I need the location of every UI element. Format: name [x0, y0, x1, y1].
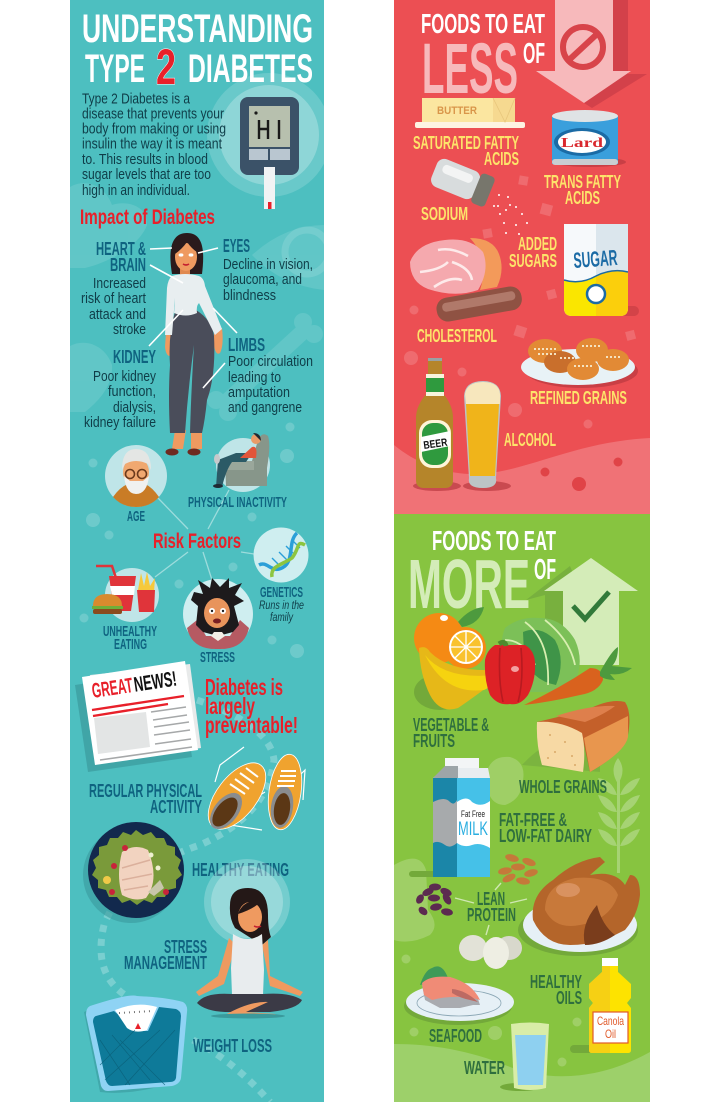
icon: newspaper [75, 661, 201, 772]
label: physical inactivity: PHYSICAL INACTIVITY [188, 494, 287, 511]
callout: heart & brain: BRAIN [110, 255, 146, 275]
title: foods to eat less of: LESS [422, 30, 518, 109]
label: genetics: Runs in the [259, 600, 304, 612]
callout: limbs [228, 335, 313, 416]
callout: eyes: blindness [223, 287, 276, 304]
text: diabetes is largely preventable: Diabetes is [205, 674, 283, 700]
icon: sugar bag [564, 224, 639, 316]
label: unhealthy eating [103, 623, 157, 653]
label: genetics: GENETICS [260, 584, 303, 601]
text: intro paragraph: sugar levels that are too [82, 166, 211, 183]
label: added sugars: SUGARS [509, 251, 557, 271]
text: intro paragraph: Type 2 Diabetes is a [82, 90, 191, 108]
connector lines: lean protein [455, 883, 527, 935]
heading: impact of diabetes: Impact of Diabetes [80, 206, 215, 229]
title: TYPE [85, 47, 145, 91]
callout: eyes [223, 236, 313, 304]
title: foods to eat less of [421, 8, 545, 109]
text: intro paragraph [82, 90, 226, 199]
title [82, 7, 313, 95]
icon: lard can [552, 110, 626, 167]
label: genetics: family [270, 612, 294, 624]
icon: canola oil bottle: Canola [597, 1014, 624, 1028]
icon: butter [415, 98, 525, 128]
icon: meat and sausage [410, 238, 524, 323]
label: refined grains: REFINED GRAINS [530, 388, 627, 408]
label: fat-free & low-fat dairy: LOW-FAT DAIRY [499, 826, 592, 846]
callout: heart & brain: attack and [89, 306, 146, 323]
icon: lard can: Lard [561, 136, 603, 151]
callout: limbs: leading to [228, 369, 281, 386]
callout: heart & brain: stroke [113, 321, 146, 338]
title: foods to eat more of: FOODS TO EAT [432, 525, 556, 556]
label: stress management: MANAGEMENT [124, 953, 207, 973]
icon: salad plate [83, 822, 184, 923]
figure: woman [165, 233, 223, 456]
icon: butter: BUTTER [437, 105, 477, 117]
title: UNDERSTANDING [82, 7, 313, 51]
icon: almonds [497, 853, 539, 886]
callout: eyes: Decline in vision, [223, 256, 313, 273]
label: saturated fatty acids: ACIDS [484, 149, 519, 169]
title: DIABETES [188, 47, 313, 91]
callout: kidney [84, 347, 156, 431]
text: intro paragraph: insulin the way it is meant [82, 136, 223, 152]
label: added sugars: ADDED [518, 234, 557, 254]
icon: glass of water [500, 1022, 549, 1091]
text: diabetes is largely preventable [205, 674, 298, 738]
callout: kidney: dialysis, [113, 399, 156, 416]
icon: bread loaf [522, 701, 629, 772]
icon: sugar bag: SUGAR [573, 245, 618, 273]
icon: stressed woman (stress) [183, 578, 253, 649]
icon: wheat [598, 758, 640, 873]
text: diabetes is largely preventable: largely [205, 693, 255, 719]
text: intro paragraph: high in an individual. [82, 182, 190, 199]
label: healthy eating: HEALTHY EATING [192, 860, 289, 880]
label: regular physical activity: REGULAR PHYSICAL [89, 781, 202, 801]
text: intro paragraph: to. This results in blood [82, 151, 208, 168]
label: lean protein: PROTEIN [467, 905, 516, 925]
icon: eggs [459, 935, 522, 969]
callout: limbs: Poor circulation [228, 353, 313, 370]
label: trans fatty acids: TRANS FATTY [544, 172, 621, 192]
label: stress management [124, 937, 207, 973]
connector lines: risk factors [155, 490, 254, 580]
callout: heart & brain: risk of heart [81, 290, 147, 307]
label: alcohol: ALCOHOL [504, 430, 556, 450]
title: 2 [156, 39, 176, 95]
icon: milk carton [409, 758, 490, 877]
label: healthy oils: OILS [556, 988, 582, 1008]
text: intro paragraph: body from making or using [82, 120, 226, 138]
panel: foods to eat less of [394, 0, 650, 514]
icon: fruits and vegetables [414, 607, 632, 710]
icon: milk carton: Fat Free [461, 809, 485, 819]
icon: dna (genetics) [254, 528, 308, 582]
label: water: WATER [464, 1058, 505, 1078]
callout: kidney: KIDNEY [113, 347, 156, 367]
label: unhealthy eating: EATING [114, 636, 147, 653]
label: vegetable & fruits: VEGETABLE & [413, 715, 489, 735]
label: genetics [259, 584, 304, 624]
callout: limbs: LIMBS [228, 335, 265, 355]
label: vegetable & fruits [413, 715, 489, 751]
label: whole grains: WHOLE GRAINS [519, 777, 607, 797]
icon: beer bottle and glass [413, 358, 511, 491]
label: regular physical activity: ACTIVITY [150, 797, 202, 817]
icon: glucose meter [207, 73, 331, 209]
title: foods to eat more of: OF [534, 554, 556, 586]
callout lines: body [149, 248, 237, 388]
label: regular physical activity [89, 781, 202, 817]
label: weight loss: WEIGHT LOSS [193, 1036, 272, 1056]
icon: beer bottle and glass: BEER [423, 437, 448, 452]
icon: running shoes [197, 747, 306, 839]
label: lean protein [467, 889, 516, 925]
icon: bread rolls on plate [521, 338, 638, 388]
icon: fast food (unhealthy eating) [92, 566, 159, 622]
title: foods to eat more of: MORE [408, 545, 530, 623]
icon: older man (age) [105, 445, 167, 507]
title: foods to eat less of: FOODS TO EAT [421, 8, 545, 39]
icon: canola oil bottle [570, 958, 631, 1053]
panel: understanding type 2 diabetes [70, 0, 331, 1102]
callout: limbs: and gangrene [228, 399, 302, 416]
icon: kidney beans [414, 884, 454, 917]
icon: meditating woman [196, 859, 303, 1018]
callout: limbs: amputation [228, 384, 290, 401]
label: lean protein: LEAN [477, 889, 505, 909]
label: fat-free & low-fat dairy [499, 810, 592, 846]
callout: heart & brain [81, 239, 147, 338]
label: healthy oils: HEALTHY [530, 972, 582, 992]
icon: newspaper: NEWS! [132, 668, 178, 697]
callout: kidney: kidney failure [84, 414, 156, 431]
icon: milk carton: MILK [458, 819, 488, 840]
callout: heart & brain: HEART & [96, 239, 146, 259]
icon: salt shaker [428, 156, 528, 235]
callout: eyes: glaucoma, and [223, 271, 302, 288]
icon: down arrow with no symbol [536, 0, 647, 108]
icon: canola oil bottle: Oil [605, 1027, 616, 1041]
label: saturated fatty acids: SATURATED FATTY [413, 133, 519, 153]
label: fat-free & low-fat dairy: FAT-FREE & [499, 810, 567, 830]
icon: weighing scale [84, 995, 187, 1093]
title: foods to eat less of: OF [523, 38, 545, 70]
label: seafood: SEAFOOD [429, 1026, 482, 1046]
label: unhealthy eating: UNHEALTHY [103, 623, 157, 640]
panel: foods to eat more of [394, 514, 650, 1102]
text: intro paragraph: disease that prevents your [82, 106, 224, 122]
callout: kidney: Poor kidney [93, 368, 156, 385]
icon: man in armchair (physical inactivity) [213, 433, 270, 492]
icon: salmon on plate [404, 966, 514, 1025]
icon: up arrow with check [526, 558, 638, 665]
label: cholesterol: CHOLESTEROL [417, 326, 497, 346]
heading: risk factors: Risk Factors [153, 530, 241, 553]
callout: kidney: function, [108, 383, 156, 400]
callout: heart & brain: Increased [93, 275, 146, 292]
icon: roast chicken on plate [518, 857, 640, 956]
callout: eyes: EYES [223, 236, 250, 256]
label: added sugars [509, 234, 557, 271]
label: stress management: STRESS [164, 937, 207, 957]
icon: newspaper: GREAT [90, 674, 134, 703]
label: healthy oils [530, 972, 582, 1008]
label: trans fatty acids: ACIDS [565, 188, 600, 208]
label: age: AGE [127, 508, 145, 525]
label: vegetable & fruits: FRUITS [413, 731, 455, 751]
label: saturated fatty acids [413, 133, 519, 169]
label: trans fatty acids [544, 172, 621, 208]
label: sodium: SODIUM [421, 204, 468, 224]
label: stress: STRESS [200, 649, 235, 666]
text: diabetes is largely preventable: preventable! [205, 712, 298, 738]
title: foods to eat more of [408, 525, 556, 623]
